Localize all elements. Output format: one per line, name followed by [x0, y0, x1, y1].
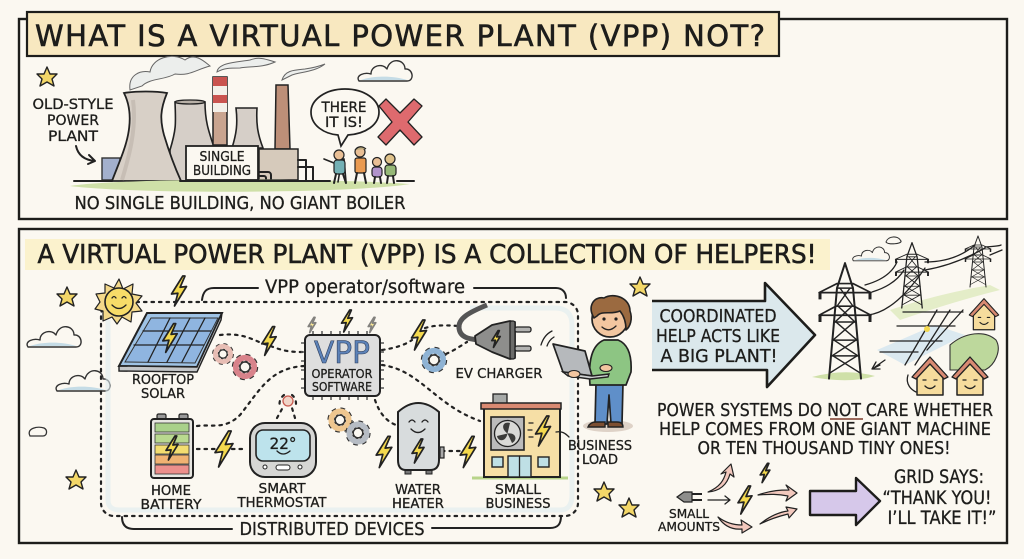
device: smart thermostat: THERMOSTAT [237, 495, 327, 511]
speech bubble: there it is [311, 89, 379, 146]
dotted links [197, 325, 480, 451]
icon: bolt [215, 431, 233, 467]
small amounts diagram [658, 463, 797, 534]
panel: collection of helpers [19, 229, 1007, 543]
icon: bolt [262, 327, 276, 355]
statement: power systems: HELP COMES FROM ONE GIANT MACHINE [659, 419, 991, 440]
device: home battery: BATTERY [140, 497, 202, 513]
label: old-style power plant: OLD-STYLE [32, 97, 114, 113]
device: small business: SMALL [495, 482, 541, 498]
device: rooftop solar [119, 313, 222, 402]
arrow: coordinated help: COORDINATED [660, 307, 776, 327]
label: business load: BUSINESS [568, 438, 632, 454]
device: small business [472, 394, 568, 512]
label: business load [556, 432, 632, 468]
label: VPP operator/software [202, 277, 566, 300]
speech bubble: there it is: THERE [321, 100, 366, 116]
title banner: WHAT IS A VIRTUAL POWER PLANT (VPP) NOT? [35, 19, 765, 53]
icons: gears [331, 411, 367, 442]
arrow: coordinated help [652, 283, 815, 387]
heading: A VIRTUAL POWER PLANT (VPP) IS A COLLECTION OF HELPERS! [38, 240, 816, 270]
hub: VPP operator software: OPERATOR [312, 367, 372, 381]
ground [70, 180, 410, 192]
label: old-style power plant [32, 97, 114, 164]
arrow: coordinated help: A BIG PLANT! [660, 347, 778, 367]
label: old-style power plant: POWER [47, 113, 99, 129]
statement: power systems: OR TEN THOUSAND TINY ONES! [698, 438, 950, 459]
label: business load: LOAD [582, 452, 618, 468]
device: smart thermostat: 22° [270, 434, 296, 453]
icon: gear [425, 351, 443, 369]
label: distributed devices: DISTRIBUTED DEVICES [240, 520, 424, 540]
device: EV charger [456, 305, 542, 382]
smoke [130, 56, 210, 90]
caption: NO SINGLE BUILDING, NO GIANT BOILER [74, 193, 406, 214]
statement: power systems [657, 400, 993, 459]
people pointing [324, 147, 396, 183]
illustration: power plant [70, 56, 414, 192]
label: distributed devices [122, 516, 561, 540]
device: smart thermostat: SMART [258, 481, 306, 497]
label: single building [186, 146, 258, 180]
device: rooftop solar: ROOFTOP [132, 372, 194, 388]
character: operator with laptop [541, 296, 633, 432]
icon: sun [95, 279, 142, 324]
icon: bolt [412, 320, 426, 350]
label: old-style power plant: PLANT [48, 129, 98, 145]
network region: devices [95, 276, 632, 540]
arrow: purple [810, 478, 880, 525]
icons: gears [215, 346, 254, 376]
grid says: I’LL TAKE IT!” [888, 508, 996, 529]
device: water heater: WATER [395, 482, 441, 498]
device: smart thermostat [237, 423, 327, 511]
small amounts diagram: SMALL [669, 506, 709, 521]
device: water heater [392, 403, 444, 512]
label: single building: SINGLE [200, 150, 244, 165]
illustration: grid, solar farm and homes [812, 236, 1002, 395]
device: home battery [140, 414, 202, 513]
hub: VPP operator software [301, 331, 384, 400]
pink arrows [708, 464, 797, 533]
hub: VPP operator software: VPP [314, 336, 370, 371]
sparks above hub [308, 310, 376, 333]
icon: bolt [460, 436, 476, 468]
icon: cloud [358, 61, 412, 81]
grid says [882, 467, 996, 529]
panel: what a VPP is not [19, 12, 1007, 219]
icon: star [37, 67, 57, 86]
icon: bolt [172, 276, 186, 306]
label: VPP operator/software: VPP operator/software [265, 277, 465, 298]
label: single building: BUILDING [193, 164, 251, 179]
device: rooftop solar: SOLAR [141, 386, 185, 402]
icon: bolt [376, 436, 392, 468]
decorative stars and clouds [27, 277, 650, 517]
device: small business: BUSINESS [486, 496, 550, 512]
icon: red cross [378, 99, 422, 145]
icon: small plug [677, 492, 702, 502]
device: home battery: HOME [151, 483, 191, 499]
grid says: “THANK YOU! [882, 488, 992, 509]
hub: VPP operator software: SOFTWARE [312, 380, 372, 394]
speech bubble: there it is: IT IS! [325, 115, 363, 131]
arrow: coordinated help: HELP ACTS LIKE [656, 327, 780, 347]
device: water heater: HEATER [392, 496, 444, 512]
device: EV charger: EV CHARGER [456, 366, 542, 382]
small amounts diagram: AMOUNTS [658, 519, 720, 534]
grid says: GRID SAYS: [894, 467, 984, 488]
icon: small dial [283, 396, 293, 406]
